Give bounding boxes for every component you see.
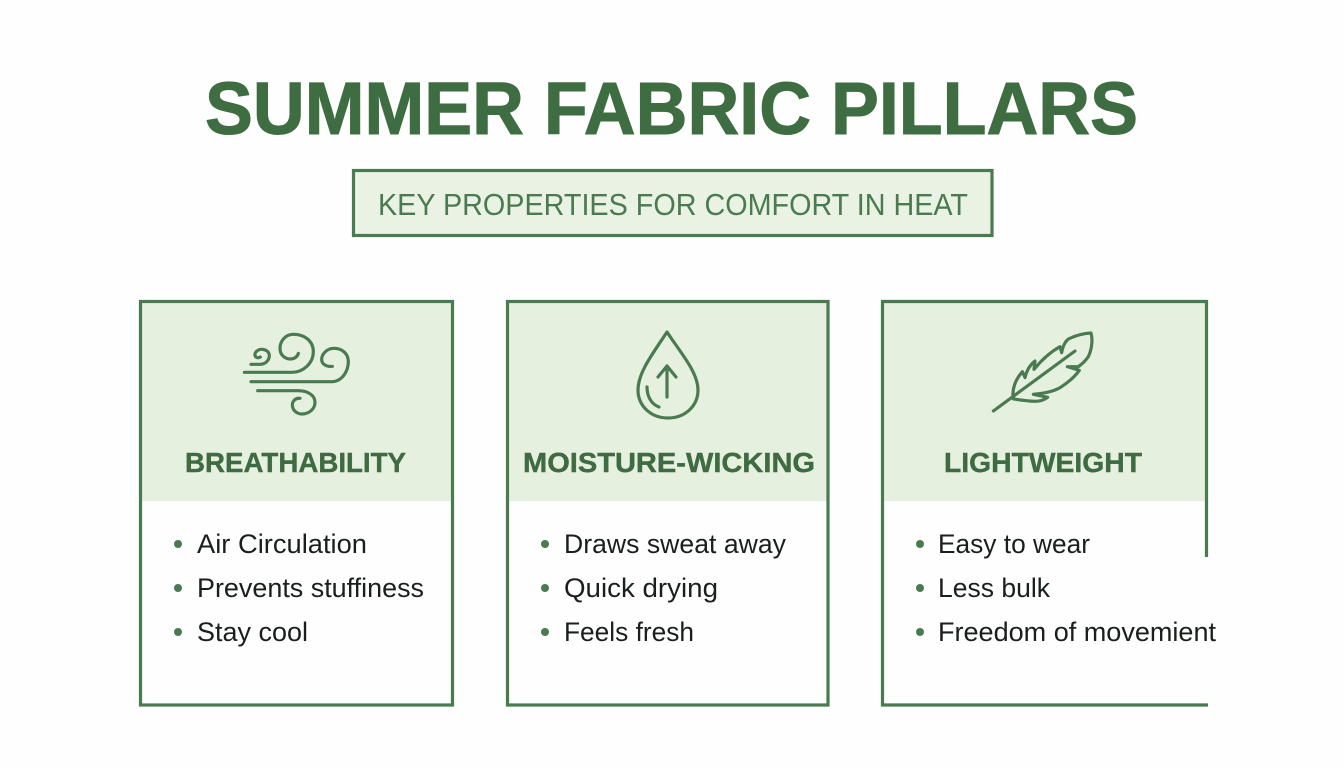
subtitle box [354,170,992,236]
list: moisture-wicking: Feels fresh [564,617,694,647]
title: SUMMER FABRIC PILLARS [205,67,1138,150]
panel: lightweight [882,302,1217,705]
heading: moisture-wicking: MOISTURE-WICKING [523,447,815,478]
heading: lightweight: LIGHTWEIGHT [944,447,1142,478]
icon: feather [993,333,1092,411]
subtitle box: KEY PROPERTIES FOR COMFORT IN HEAT [378,187,968,222]
list: lightweight [916,529,1217,647]
list: moisture-wicking [541,529,787,647]
list: moisture-wicking: Quick drying [564,573,718,603]
panel: moisture-wicking [508,302,828,705]
list: breathability [174,529,424,647]
list: breathability: Prevents stuffiness [197,573,424,603]
panel: breathability [140,302,452,705]
icon: water drop with arrow [638,332,698,418]
list: moisture-wicking: Draws sweat away [564,529,787,559]
icon: wind [244,334,348,414]
list: breathability: Stay cool [197,617,308,647]
list: breathability: Air Circulation [197,529,367,559]
heading: breathability: BREATHABILITY [185,447,406,478]
list: lightweight: Freedom of movemient [938,617,1217,647]
list: lightweight: Easy to wear [938,529,1090,559]
list: lightweight: Less bulk [938,573,1051,603]
